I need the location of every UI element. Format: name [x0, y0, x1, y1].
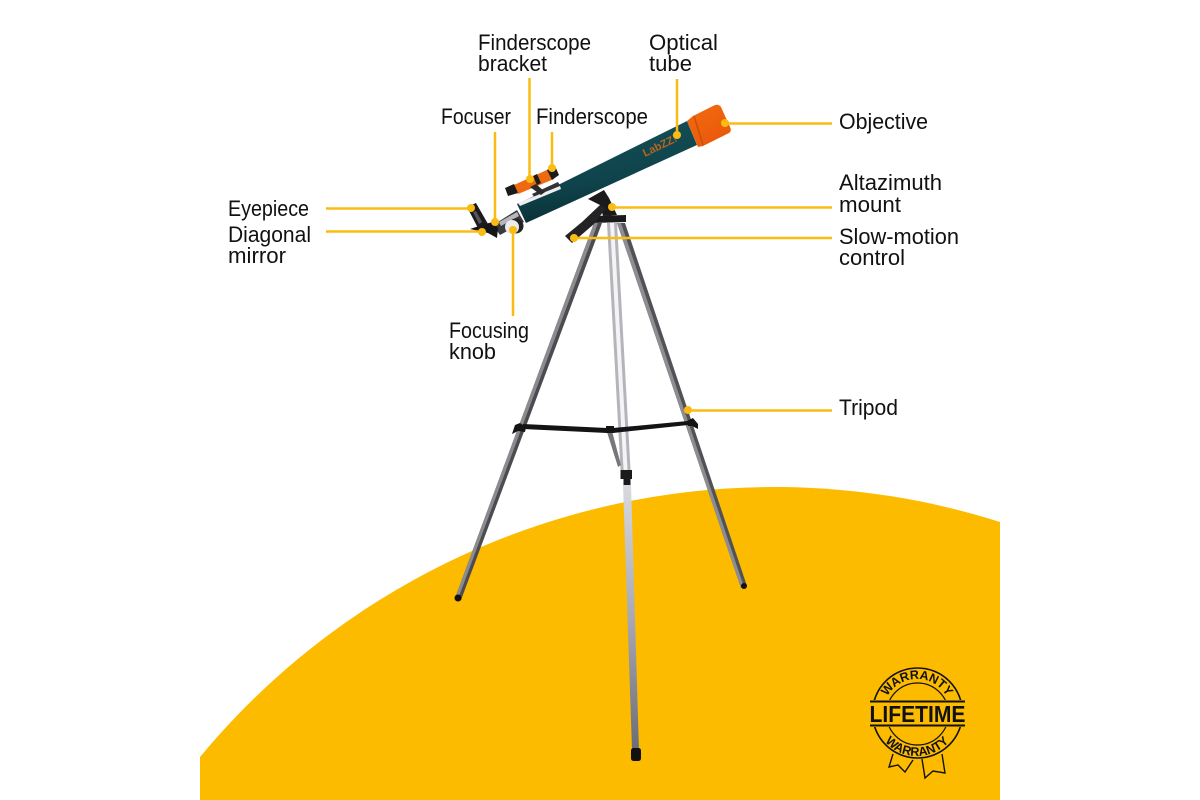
yellow hill background: [200, 487, 1000, 800]
tripod: [454, 223, 747, 761]
left foot: [454, 594, 462, 602]
label: Optical tube: [649, 30, 718, 139]
eyepiece: [467, 203, 488, 230]
mount head: [588, 190, 617, 216]
label: Altazimuth mount: [608, 170, 942, 217]
label: Slow-motion control: Slow-motion: [839, 224, 959, 249]
WARRANTY bottom: WARRANTY: [886, 735, 947, 756]
tripod left leg: [455, 223, 602, 600]
ribbons: [889, 754, 913, 772]
label: Altazimuth mount: mount: [839, 192, 901, 217]
tripod centre leg upper: [607, 223, 631, 478]
label: Focusing knob: knob: [449, 339, 496, 364]
label: Optical tube: Optical: [649, 30, 718, 55]
label: Tripod: [684, 395, 898, 420]
tripod centre leg lower: [623, 485, 639, 750]
slow-motion control: [565, 205, 606, 243]
left clamp: [512, 423, 526, 434]
optical tube: [517, 121, 697, 223]
logo: LabZZ!: [641, 133, 679, 160]
spreader brace: [607, 431, 621, 467]
label: Altazimuth mount: Altazimuth: [839, 170, 942, 195]
WARRANTY top: WARRANTY: [880, 670, 954, 694]
label: Optical tube: tube: [649, 51, 692, 76]
label: Eyepiece: [228, 196, 475, 221]
label: Focusing knob: [449, 226, 529, 364]
centre leg foot: [631, 748, 641, 761]
label: Focuser: [441, 104, 511, 226]
label: Slow-motion control: [570, 224, 959, 270]
yoke crossbar: [593, 215, 626, 223]
label: Tripod: Tripod: [839, 395, 898, 420]
label: Finderscope bracket: [478, 30, 591, 183]
label: Finderscope bracket: Finderscope: [478, 30, 591, 55]
label: Finderscope: [536, 104, 648, 172]
label: Focusing knob: Focusing: [449, 318, 529, 343]
label: Slow-motion control: control: [839, 245, 905, 270]
right foot: [741, 583, 747, 589]
band: [868, 700, 967, 727]
leg clamp: [620, 470, 632, 479]
objective cap: [687, 105, 731, 147]
label: Diagonal mirror: [228, 222, 486, 268]
lifetime warranty badge: [870, 667, 966, 780]
label: Objective: [721, 109, 928, 134]
label: Focuser: Focuser: [441, 104, 511, 129]
label: Diagonal mirror: Diagonal: [228, 222, 311, 247]
label: Finderscope bracket: bracket: [478, 51, 547, 76]
tripod right leg: [617, 223, 747, 588]
label: Diagonal mirror: mirror: [228, 243, 286, 268]
finderscope bracket: [530, 184, 545, 195]
tube slot: [532, 182, 561, 199]
LIFETIME text: LIFETIME: [870, 701, 966, 727]
label: Eyepiece: Eyepiece: [228, 196, 309, 221]
focusing knob: [505, 218, 524, 234]
label: Finderscope: Finderscope: [536, 104, 648, 129]
diagonal mirror: [470, 222, 498, 238]
spreader hub: [606, 426, 614, 433]
spreader bars: [523, 424, 607, 433]
finderscope: [514, 169, 554, 194]
telescope: [467, 105, 731, 243]
right clamp: [687, 418, 698, 429]
label: Objective: Objective: [839, 109, 928, 134]
drawtube: [493, 210, 524, 235]
